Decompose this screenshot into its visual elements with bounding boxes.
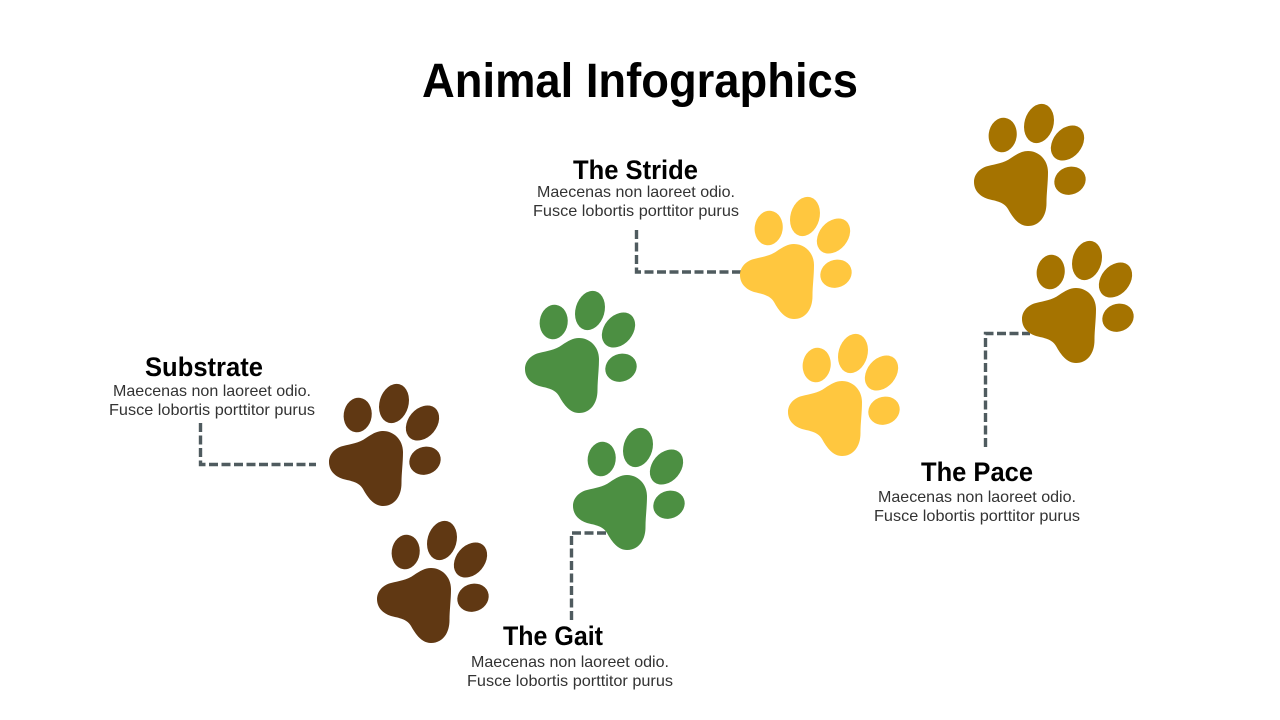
text block: the pace: Maecenas non laoreet odio. [878,489,1076,506]
paw: gold lower [1022,237,1139,363]
text block: the stride: Fusce lobortis porttitor purus [533,203,739,220]
text block: substrate: Fusce lobortis porttitor purus [109,402,315,419]
connector: substrate [200,423,316,464]
paw: brown lower [377,517,494,643]
paw: yellow lower [788,330,905,456]
text block: the gait: The Gait [503,621,603,651]
text block: substrate: Substrate [145,352,263,382]
text block: the pace: Fusce lobortis porttitor purus [874,508,1080,525]
text block: the gait: Fusce lobortis porttitor purus [467,673,673,690]
connector: the gait [572,533,610,620]
text block: the stride: The Stride [573,155,698,185]
text block: substrate: Maecenas non laoreet odio. [113,383,311,400]
paw: brown upper [329,380,446,506]
connector: the pace [986,334,1030,447]
text block: substrate [109,352,315,419]
text block: the pace: The Pace [921,457,1033,487]
paw: yellow upper [740,193,857,319]
text block: the pace [874,457,1080,525]
paw: gold upper [974,100,1091,226]
text block: the stride: Maecenas non laoreet odio. [537,184,735,201]
text block: the gait [467,621,673,690]
title: Animal Infographics [422,55,858,108]
text block: the stride [533,155,739,220]
connector: the stride [636,230,745,272]
paw: green lower [573,424,690,550]
paw: green upper [525,287,642,413]
text block: the gait: Maecenas non laoreet odio. [471,654,669,671]
